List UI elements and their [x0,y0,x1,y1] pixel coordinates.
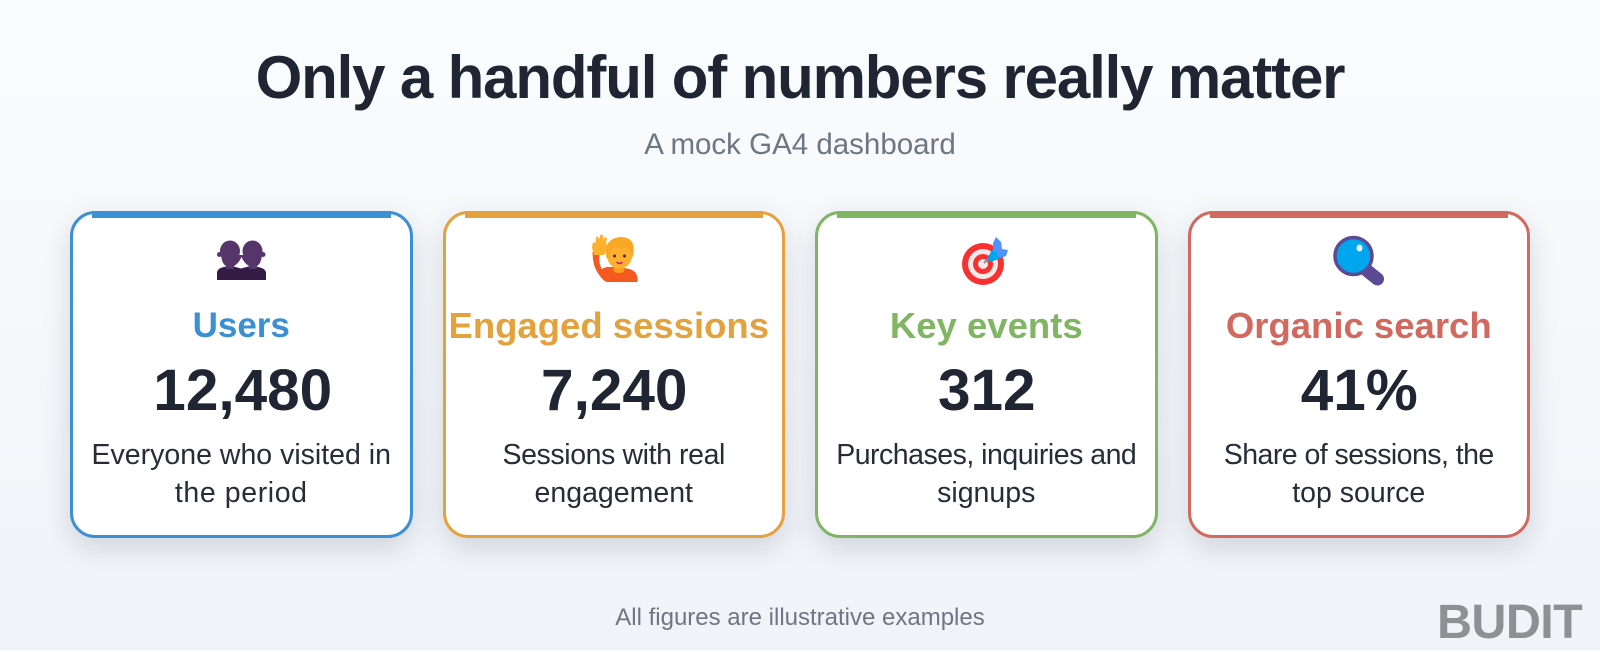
value: 41% [1301,358,1418,423]
label: Engaged sessions [448,305,769,346]
watermark: BUDIT [1437,595,1582,649]
description [92,439,391,509]
panel: engaged sessions [442,211,785,538]
icon: magnifying glass [1333,236,1384,286]
footnote: All figures are illustrative examples [615,604,985,631]
description [502,439,725,509]
icon: person raising hand [592,234,638,282]
description [836,439,1136,509]
value: 7,240 [541,358,687,423]
panel: engaged sessions: Sessions with real [502,439,725,471]
panel: organic search: Share of sessions, the [1224,439,1494,471]
panel: organic search: top source [1292,477,1425,509]
icon: bullseye dart [962,237,1008,285]
panel: organic search [1188,211,1530,538]
panel: key events: signups [937,477,1035,509]
panel: key events [815,211,1158,538]
label: Key events [890,305,1083,346]
panel: key events: Purchases, inquiries and [836,439,1136,471]
panel: users: Everyone who visited in [92,439,391,471]
value: 12,480 [153,358,332,423]
label: Organic search [1226,305,1492,346]
subtitle: A mock GA4 dashboard [644,128,956,161]
icon: silhouettes [217,240,266,280]
panel: users: the period [175,477,308,509]
description [1224,439,1494,509]
title: Only a handful of numbers really matter [256,44,1344,111]
panel: engaged sessions: engagement [535,477,693,509]
value: 312 [938,358,1036,423]
panel: users [70,211,412,538]
label: Users [193,306,290,345]
